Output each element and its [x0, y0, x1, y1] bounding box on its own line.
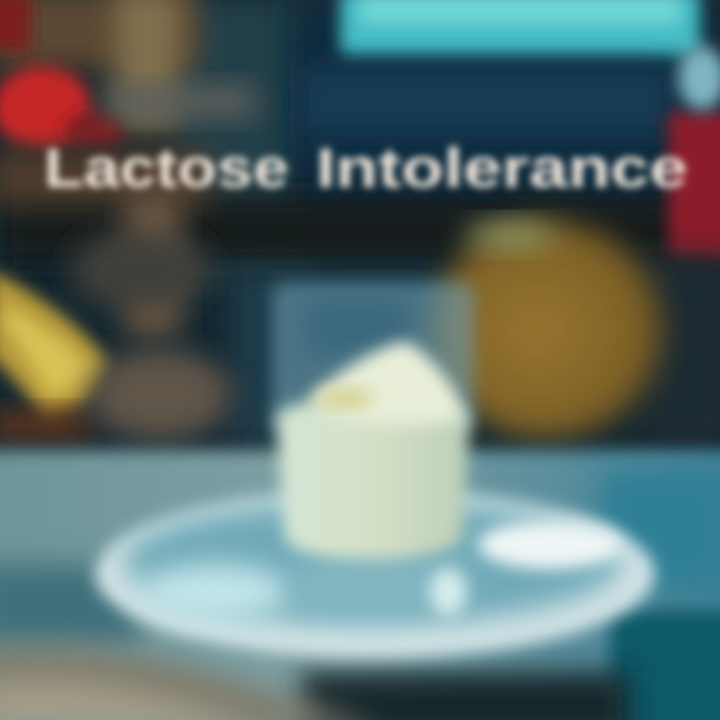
shelf items top left [0, 0, 255, 335]
dark tabletop bottom right [300, 610, 720, 720]
cloth bottom left [0, 645, 380, 720]
red bottle right [640, 46, 720, 445]
glass base reflection [295, 565, 470, 610]
navy panel [300, 66, 670, 136]
table [0, 450, 720, 720]
melon [432, 220, 664, 440]
brown blob [88, 349, 232, 441]
glass top [272, 282, 474, 432]
title: Intolerance [316, 136, 688, 199]
title [44, 136, 688, 199]
cyan panel top right [340, 0, 700, 56]
title: Lactose [44, 136, 289, 199]
glass of milk [272, 282, 474, 616]
milk foam [312, 342, 462, 425]
yellow banana [0, 270, 110, 440]
milk body [276, 394, 470, 562]
plate [95, 490, 655, 658]
